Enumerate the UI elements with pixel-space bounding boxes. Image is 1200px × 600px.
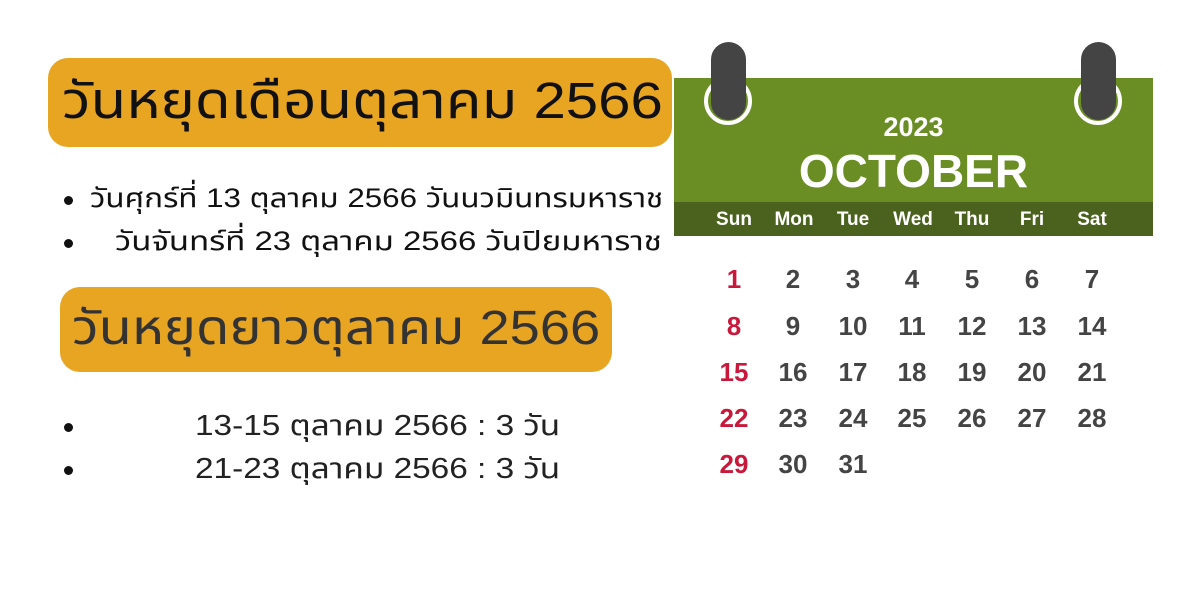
month: OCTOBER <box>799 145 1028 197</box>
weekday labels <box>716 209 1107 230</box>
date grid: 13 <box>1018 311 1046 341</box>
title text: วันหยุดยาวตุลาคม 2566 <box>72 302 600 355</box>
bullet 2 <box>64 466 73 475</box>
date grid <box>720 264 1106 479</box>
title box: month holidays <box>48 58 672 147</box>
item 2: 21-23 ตุลาคม 2566 : 3 วัน <box>195 453 560 485</box>
date grid: 8 <box>727 311 741 341</box>
date grid: 30 <box>779 449 807 479</box>
date grid: 4 <box>905 264 919 294</box>
year: 2023 <box>883 112 944 142</box>
date grid: 9 <box>786 311 800 341</box>
date grid: 1 <box>727 264 741 294</box>
date grid: 15 <box>720 357 748 387</box>
item 2: วันจันทร์ที่ 23 ตุลาคม 2566 วันปิยมหาราช <box>115 226 662 256</box>
weekday labels: Thu <box>955 209 989 230</box>
title box: long weekends <box>60 287 612 372</box>
weekday labels: Mon <box>774 209 814 230</box>
date grid: 14 <box>1078 311 1106 341</box>
title text: วันหยุดเดือนตุลาคม 2566 <box>62 72 663 129</box>
date grid: 31 <box>839 449 867 479</box>
date grid: 28 <box>1078 403 1106 433</box>
date grid: 21 <box>1078 357 1106 387</box>
bullet 1 <box>64 423 73 432</box>
date grid: 5 <box>965 264 979 294</box>
icon: right ring <box>1074 42 1122 125</box>
item 1: วันศุกร์ที่ 13 ตุลาคม 2566 วันนวมินทรมหาราช <box>90 183 663 213</box>
date grid: 22 <box>720 403 748 433</box>
date grid: 2 <box>786 264 800 294</box>
date grid: 29 <box>720 449 748 479</box>
date grid: 11 <box>898 311 926 341</box>
icon: left ring <box>704 42 752 125</box>
date grid: 25 <box>898 403 926 433</box>
weekday labels: Tue <box>837 209 869 230</box>
date grid: 24 <box>839 403 867 433</box>
weekday labels: Fri <box>1020 209 1044 230</box>
item 1: 13-15 ตุลาคม 2566 : 3 วัน <box>195 410 560 442</box>
date grid: 10 <box>839 311 867 341</box>
bullet 1 <box>64 196 73 205</box>
date grid: 18 <box>898 357 926 387</box>
date grid: 20 <box>1018 357 1046 387</box>
date grid: 26 <box>958 403 986 433</box>
calendar header <box>674 78 1153 203</box>
date grid: 27 <box>1018 403 1046 433</box>
date grid: 19 <box>958 357 986 387</box>
weekday labels: Sat <box>1077 209 1107 230</box>
weekday labels: Sun <box>716 209 752 230</box>
date grid: 17 <box>839 357 867 387</box>
date grid: 23 <box>779 403 807 433</box>
date grid: 12 <box>958 311 986 341</box>
date grid: 16 <box>779 357 807 387</box>
bullet 2 <box>64 239 73 248</box>
date grid: 7 <box>1085 264 1099 294</box>
date grid: 3 <box>846 264 860 294</box>
holiday list <box>64 180 663 257</box>
weekday labels: Wed <box>893 209 933 230</box>
long weekend list <box>64 410 560 485</box>
weekday strip <box>674 202 1153 236</box>
date grid: 6 <box>1025 264 1039 294</box>
